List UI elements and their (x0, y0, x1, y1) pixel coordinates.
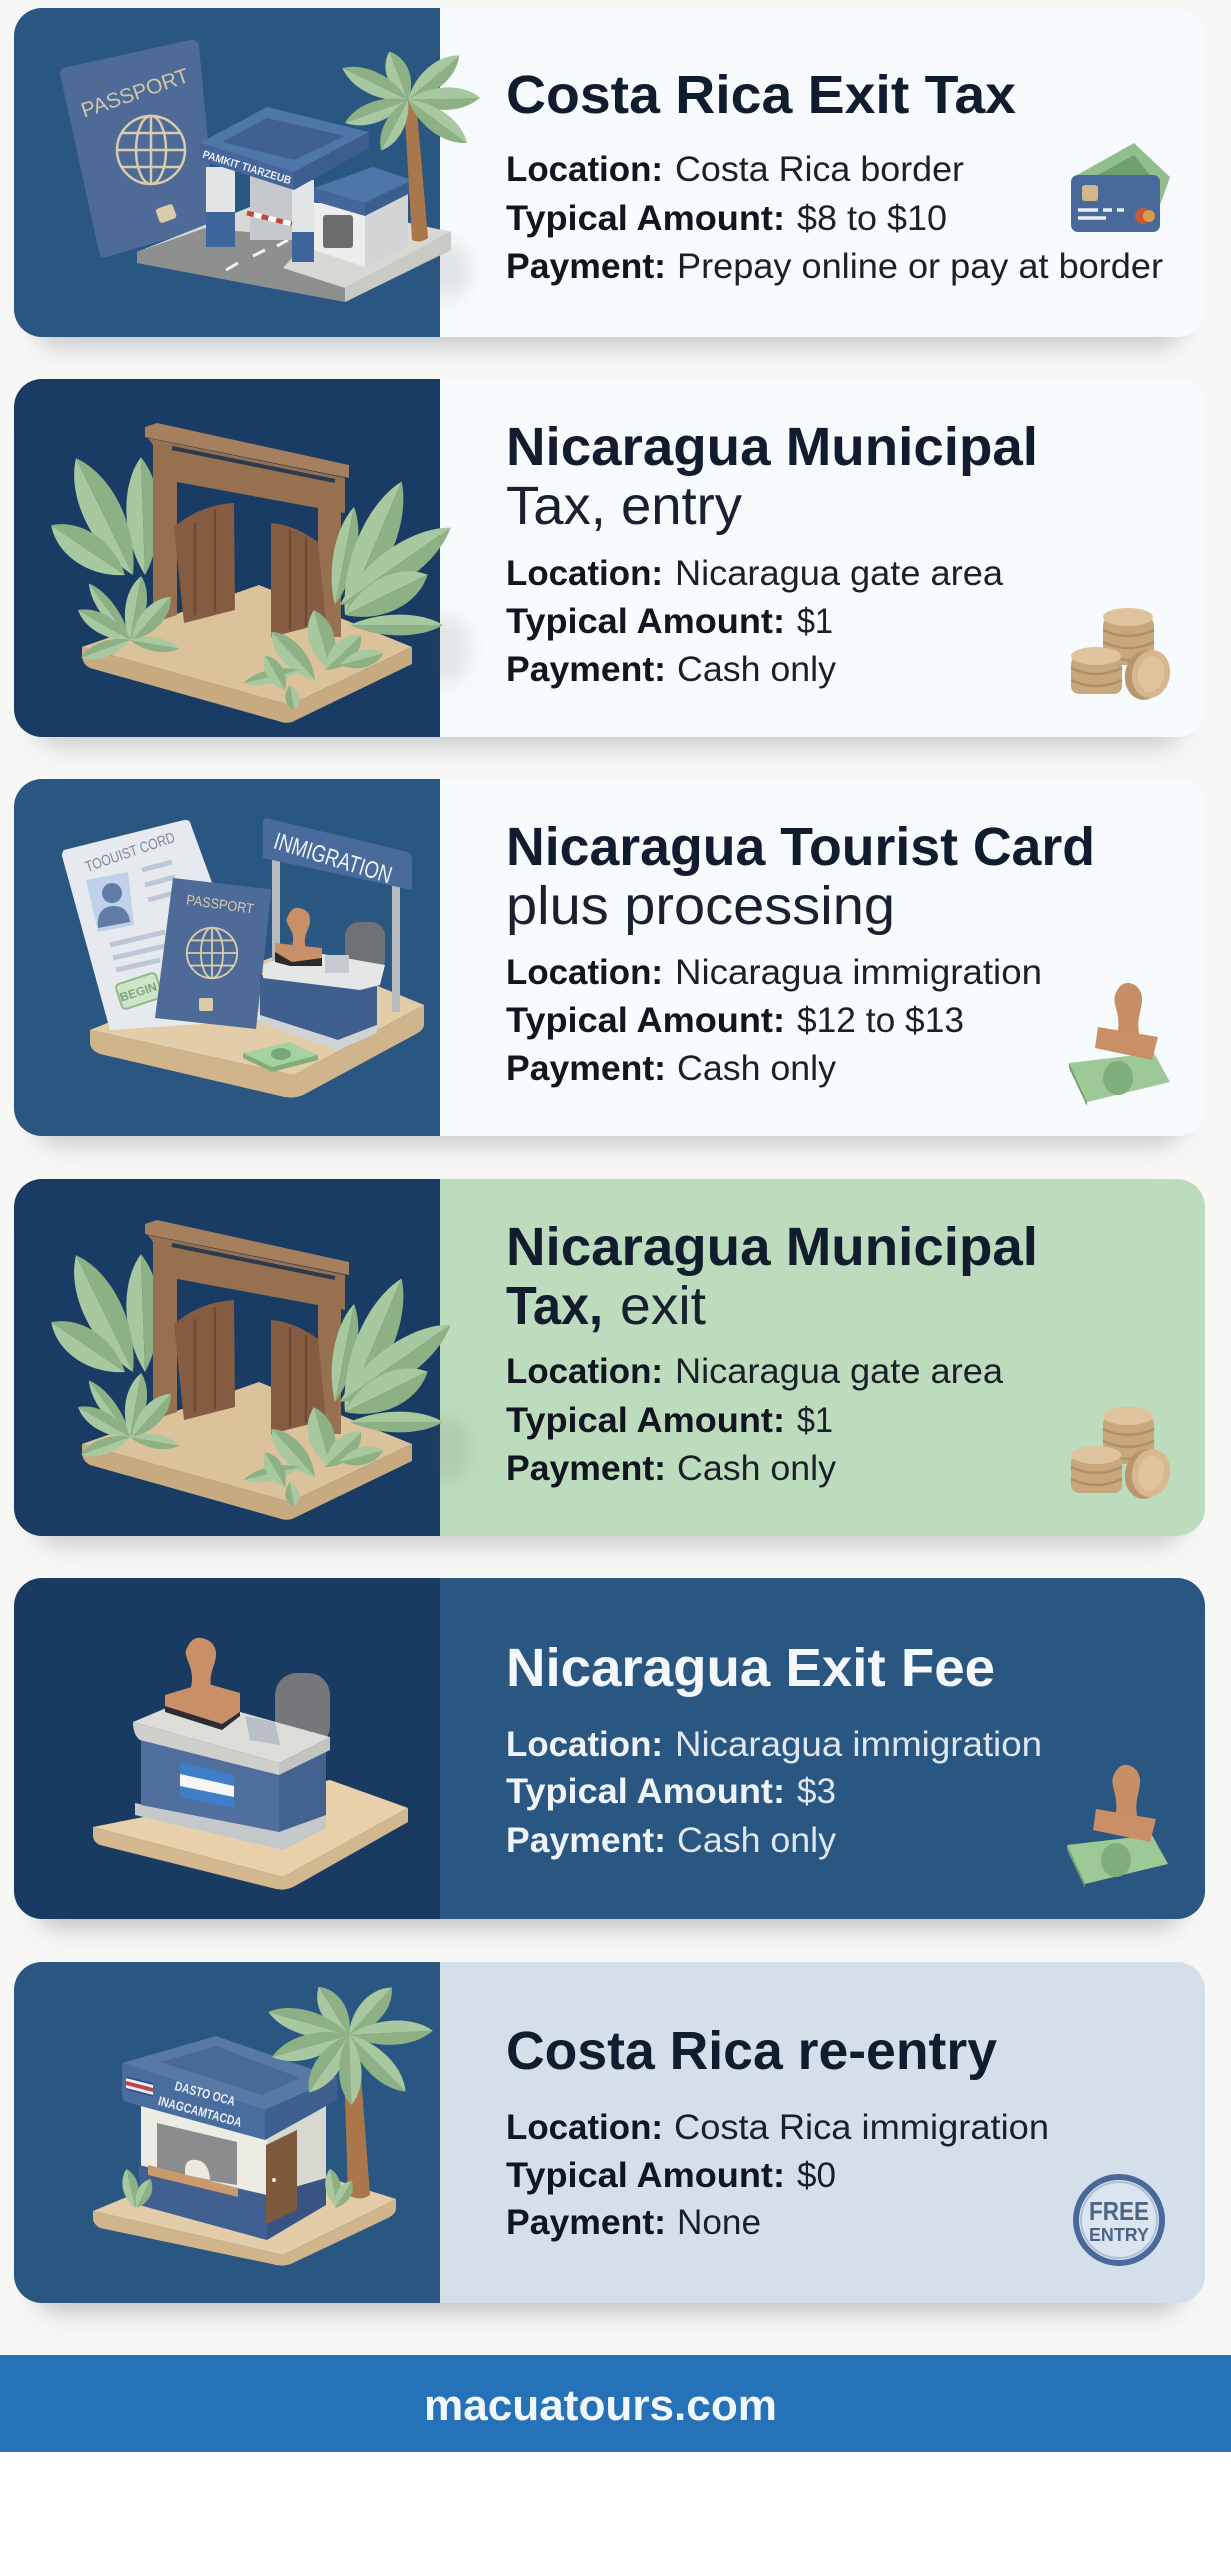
typical amount row: Typical Amount: (506, 2156, 785, 2195)
icon: credit card and cash (1071, 143, 1170, 232)
panel: card 2 details background (440, 379, 1205, 737)
location row: Costa Rica border (675, 150, 964, 189)
location row: Location: (506, 554, 663, 593)
card 5: Nicaragua Exit Fee (14, 1578, 1205, 1930)
card 6: Costa Rica re-entry (14, 1962, 1205, 2314)
panel: card 4 illustration background (14, 1179, 440, 1536)
heading: Nicaragua Tourist Card (506, 817, 1095, 877)
payment row: Cash only (677, 1821, 837, 1860)
location row: Location: (506, 953, 663, 992)
typical amount row (506, 1001, 964, 1040)
location row (506, 1352, 1004, 1391)
location row: Nicaragua immigration (675, 953, 1042, 992)
payment row: Payment: (506, 1821, 666, 1860)
typical amount row: $0 (797, 2156, 836, 2195)
card 4: Nicaragua Municipal Tax, exit (14, 1179, 1205, 1547)
heading: Nicaragua Exit Fee (506, 1638, 995, 1698)
illustration: tourist card, passport and immigration desk: BEGIN (118, 979, 159, 1004)
typical amount row (506, 199, 947, 238)
panel: card 3 illustration background (14, 779, 440, 1136)
typical amount row: Typical Amount: (506, 1772, 785, 1811)
heading: Tax, (506, 1276, 603, 1336)
icon: free entry badge (1076, 2177, 1162, 2263)
location row (506, 1725, 1042, 1764)
location row (506, 554, 1004, 593)
heading: exit (620, 1276, 706, 1336)
payment row: Cash only (677, 1049, 837, 1088)
icon: coins (1071, 1407, 1174, 1502)
illustration: immigration booth with palm: DASTO OCA (173, 2078, 237, 2109)
illustration: wooden gate with plants (42, 423, 460, 723)
heading: Tax, entry (506, 476, 742, 536)
payment row: Payment: (506, 2203, 666, 2242)
panel: card 6 details background (440, 1962, 1205, 2303)
panel: card 5 illustration background (14, 1578, 440, 1919)
card 3: Nicaragua Tourist Card (14, 779, 1205, 1147)
panel: card 5 details background (440, 1578, 1205, 1919)
payment row: Prepay online or pay at border (677, 247, 1163, 286)
illustration: immigration desk with stamp and flag (93, 1638, 408, 1890)
icon: stamp on cash (1067, 1765, 1168, 1888)
heading (506, 817, 1095, 936)
heading: Costa Rica re-entry (506, 2021, 997, 2081)
location row: Location: (506, 1725, 663, 1764)
payment row: Cash only (677, 650, 837, 689)
payment row (506, 650, 837, 689)
payment row: Payment: (506, 1449, 666, 1488)
illustration: passport and border post with palm: PASSPORT (78, 64, 192, 123)
location row (506, 953, 1042, 992)
footer website text: macuatours.com (424, 2381, 777, 2430)
heading (506, 1217, 1038, 1336)
illustration: tourist card, passport and immigration desk: PASSPORT (185, 891, 255, 917)
panel: card 4 details background (440, 1179, 1205, 1536)
icon: free entry badge: FREE (1089, 2196, 1149, 2226)
icon: coins (1071, 608, 1174, 703)
icon: stamp on cash (1069, 983, 1170, 1106)
heading: Costa Rica Exit Tax (506, 65, 1016, 125)
icon: free entry badge: ENTRY (1089, 2225, 1149, 2245)
illustration: tourist card, passport and immigration desk: TOOUIST CORD (83, 829, 177, 876)
payment row: None (677, 2203, 761, 2242)
location row: Costa Rica immigration (674, 2108, 1049, 2147)
location row: Location: (506, 150, 663, 189)
typical amount row: $12 to $13 (797, 1001, 964, 1040)
panel: card 2 illustration background (14, 379, 440, 737)
typical amount row: Typical Amount: (506, 199, 785, 238)
location row: Location: (506, 2108, 663, 2147)
card 1: Costa Rica Exit Tax (14, 8, 1205, 348)
illustration: passport and border post with palm: PAMKIT TIARZEUB (201, 149, 292, 187)
typical amount row: $1 (797, 602, 833, 641)
typical amount row: $8 to $10 (797, 199, 947, 238)
payment row (506, 1821, 837, 1860)
payment row (506, 1049, 837, 1088)
heading (506, 417, 1038, 536)
typical amount row: $1 (797, 1401, 833, 1440)
illustration: immigration booth with palm (93, 1979, 434, 2266)
illustration: tourist card, passport and immigration desk: INMIGRATION (271, 828, 395, 889)
payment row (506, 2203, 761, 2242)
typical amount row: $3 (797, 1772, 836, 1811)
panel: card 6 illustration background (14, 1962, 440, 2303)
panel: card 1 illustration background (14, 8, 440, 337)
panel: card 1 details background (440, 8, 1205, 337)
location row (506, 2108, 1049, 2147)
illustration: passport and border post with palm (60, 40, 480, 302)
footer (0, 2355, 1231, 2452)
illustration: tourist card, passport and immigration desk (62, 818, 424, 1098)
typical amount row: Typical Amount: (506, 602, 785, 641)
heading: Nicaragua Municipal (506, 417, 1038, 477)
location row: Nicaragua gate area (675, 554, 1004, 593)
heading: Nicaragua Municipal (506, 1217, 1038, 1277)
payment row: Cash only (677, 1449, 837, 1488)
location row: Nicaragua immigration (675, 1725, 1042, 1764)
card 2: Nicaragua Municipal Tax, entry (14, 379, 1205, 748)
payment row (506, 1449, 837, 1488)
payment row: Payment: (506, 650, 666, 689)
typical amount row: Typical Amount: (506, 1401, 785, 1440)
illustration: immigration booth with palm: INAGCAMTACDA (157, 2093, 244, 2130)
payment row: Payment: (506, 247, 666, 286)
location row: Location: (506, 1352, 663, 1391)
panel: card 3 details background (440, 779, 1205, 1136)
typical amount row: Typical Amount: (506, 1001, 785, 1040)
location row (506, 150, 964, 189)
payment row: Payment: (506, 1049, 666, 1088)
location row: Nicaragua gate area (675, 1352, 1004, 1391)
heading: plus processing (506, 876, 895, 936)
illustration: wooden gate with plants (42, 1220, 460, 1520)
